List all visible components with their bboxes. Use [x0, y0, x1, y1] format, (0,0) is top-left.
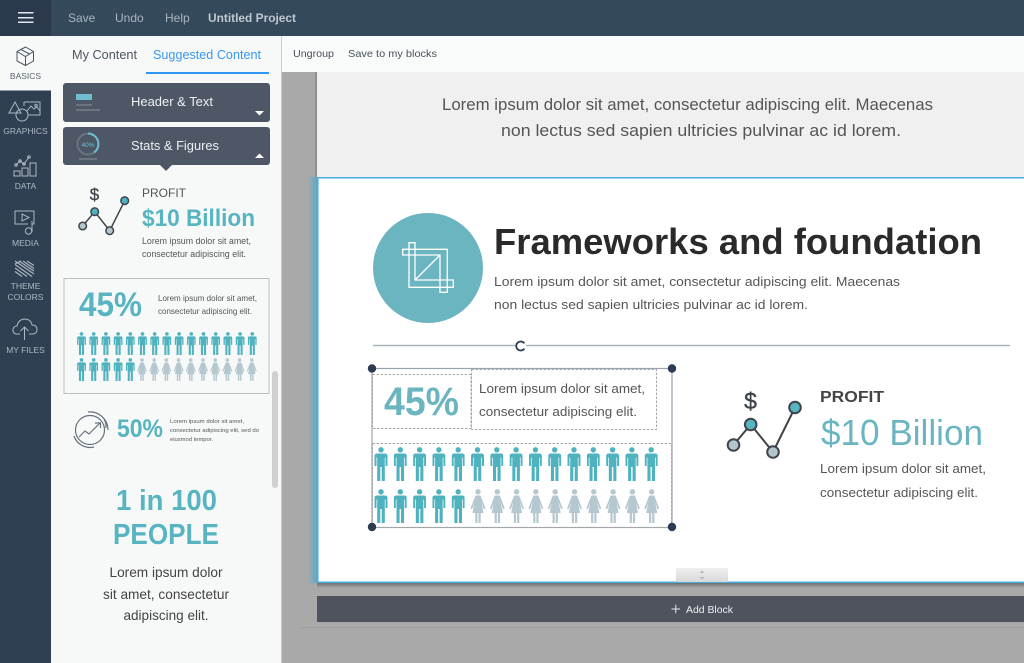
top navigation bar — [0, 0, 1024, 36]
library item: 50 percent — [74, 412, 259, 447]
canvas background — [282, 72, 1024, 663]
icon rail — [0, 36, 51, 663]
library item: 1 in 100 people: Lorem ipsum dolor — [110, 564, 223, 580]
library item: 1 in 100 people: adipiscing elit. — [124, 607, 208, 623]
rail item: graphics — [3, 102, 48, 136]
rail item: my files — [6, 319, 45, 355]
dashed box: description — [472, 370, 656, 430]
previous block: Lorem ipsum dolor sit amet, consectetur adipiscing elit. Maecenas — [442, 96, 933, 114]
divider with rotate handle — [373, 340, 1010, 352]
selection handles — [368, 364, 676, 531]
icon: circular growth arrow — [74, 412, 108, 447]
rail item: theme colors — [8, 261, 44, 302]
library item: 50 percent: eiusmod tempor. — [170, 437, 213, 443]
menu: save: Save — [68, 11, 96, 25]
intro text: non lectus sed sapien ultricies pulvinar ac id lorem. — [494, 297, 808, 312]
toolbar: save to my blocks: Save to my blocks — [348, 48, 437, 60]
library item: profit: consectetur adipiscing elit. — [142, 249, 246, 259]
icon: profit line chart — [728, 388, 801, 458]
stat: profit: PROFIT — [820, 389, 884, 406]
description text: consectetur adipiscing elit. — [479, 404, 637, 419]
stat: profit: Lorem ipsum dolor sit amet, — [820, 461, 986, 476]
add block button: Add Block — [686, 605, 734, 616]
intro text: Lorem ipsum dolor sit amet, consectetur adipiscing elit. Maecenas — [494, 274, 901, 289]
library item: 1 in 100 people: PEOPLE — [113, 519, 219, 551]
stat: profit: $10 Billion — [821, 412, 983, 453]
project title: Untitled Project — [208, 11, 296, 25]
pictogram: small men and women — [77, 332, 257, 381]
menu: undo: Undo — [115, 11, 144, 25]
icon: crop in teal circle — [373, 213, 483, 323]
panel: content library — [51, 36, 282, 663]
rail item: graphics: GRAPHICS — [3, 126, 48, 136]
stat: 45 percent: 45% — [384, 380, 459, 424]
rail item: theme colors: COLORS — [8, 292, 44, 302]
dotted line under the add block button — [300, 627, 1024, 628]
dashed box: pictogram — [372, 444, 672, 528]
rail item: basics — [10, 47, 41, 81]
rail item: media: MEDIA — [12, 238, 39, 248]
selected block — [308, 177, 1024, 588]
previous block: non lectus sed sapien ultricies pulvinar ac id lorem. — [501, 122, 901, 140]
library item: 1 in 100 people: 1 in 100 — [116, 485, 217, 517]
tab: suggested content — [146, 47, 269, 74]
library item: profit: PROFIT — [142, 186, 187, 200]
heading: Frameworks and foundation — [494, 221, 982, 262]
accordion: header and text: Header & Text — [131, 95, 214, 109]
stat: profit: consectetur adipiscing elit. — [820, 485, 978, 500]
library item: 45 percent — [64, 278, 269, 394]
library item: 1 in 100 people — [103, 485, 229, 623]
library item: 50 percent: Lorem ipsum dolor sit amet, — [170, 419, 244, 425]
toolbar — [282, 36, 1024, 72]
library item: profit: Lorem ipsum dolor sit amet, — [142, 236, 251, 246]
library item: 45 percent: 45% — [79, 286, 142, 324]
rail item: media — [12, 211, 39, 248]
add block button — [317, 596, 1024, 622]
library item: 45 percent: consectetur adipiscing elit. — [158, 306, 252, 316]
menu: help: Help — [165, 11, 190, 25]
library item: profit — [79, 185, 255, 259]
pictogram: men and women — [374, 447, 659, 523]
library item: 50 percent: consectetur adipiscing elit, sed do — [170, 428, 259, 434]
rail item: theme colors: THEME — [11, 281, 41, 291]
library item: 1 in 100 people: sit amet, consectetur — [103, 586, 229, 602]
rail item: my files: MY FILES — [6, 345, 45, 355]
intro text — [494, 274, 901, 312]
icon: profit line chart: $ — [744, 388, 757, 414]
scrollbar — [272, 371, 278, 488]
accordion: stats and figures — [63, 127, 270, 171]
library item: 45 percent: Lorem ipsum dolor sit amet, — [158, 293, 257, 303]
icon: hamburger menu — [18, 12, 34, 23]
rail item: data — [14, 156, 37, 191]
dashed box: percent — [372, 374, 471, 428]
rail item: basics: BASICS — [10, 71, 41, 81]
block resize handle — [676, 568, 728, 582]
library item: profit: $10 Billion — [142, 205, 255, 232]
toolbar: ungroup: Ungroup — [293, 48, 334, 60]
selected stat group — [368, 364, 676, 531]
stat: profit — [728, 388, 986, 500]
accordion: stats and figures: Stats & Figures — [131, 139, 219, 153]
icon: profit line chart: $ — [90, 185, 100, 204]
accordion: header and text — [63, 83, 270, 122]
icon: profit line chart — [79, 185, 128, 234]
tab: my content: My Content — [72, 47, 137, 62]
accordion: stats and figures: 40% — [81, 142, 95, 149]
library item: 50 percent: 50% — [117, 415, 163, 443]
rail item: data: DATA — [15, 181, 37, 191]
description text: Lorem ipsum dolor sit amet, — [479, 381, 645, 396]
description text — [479, 381, 645, 419]
tab: suggested content: Suggested Content — [153, 47, 261, 62]
previous block — [315, 72, 1024, 177]
